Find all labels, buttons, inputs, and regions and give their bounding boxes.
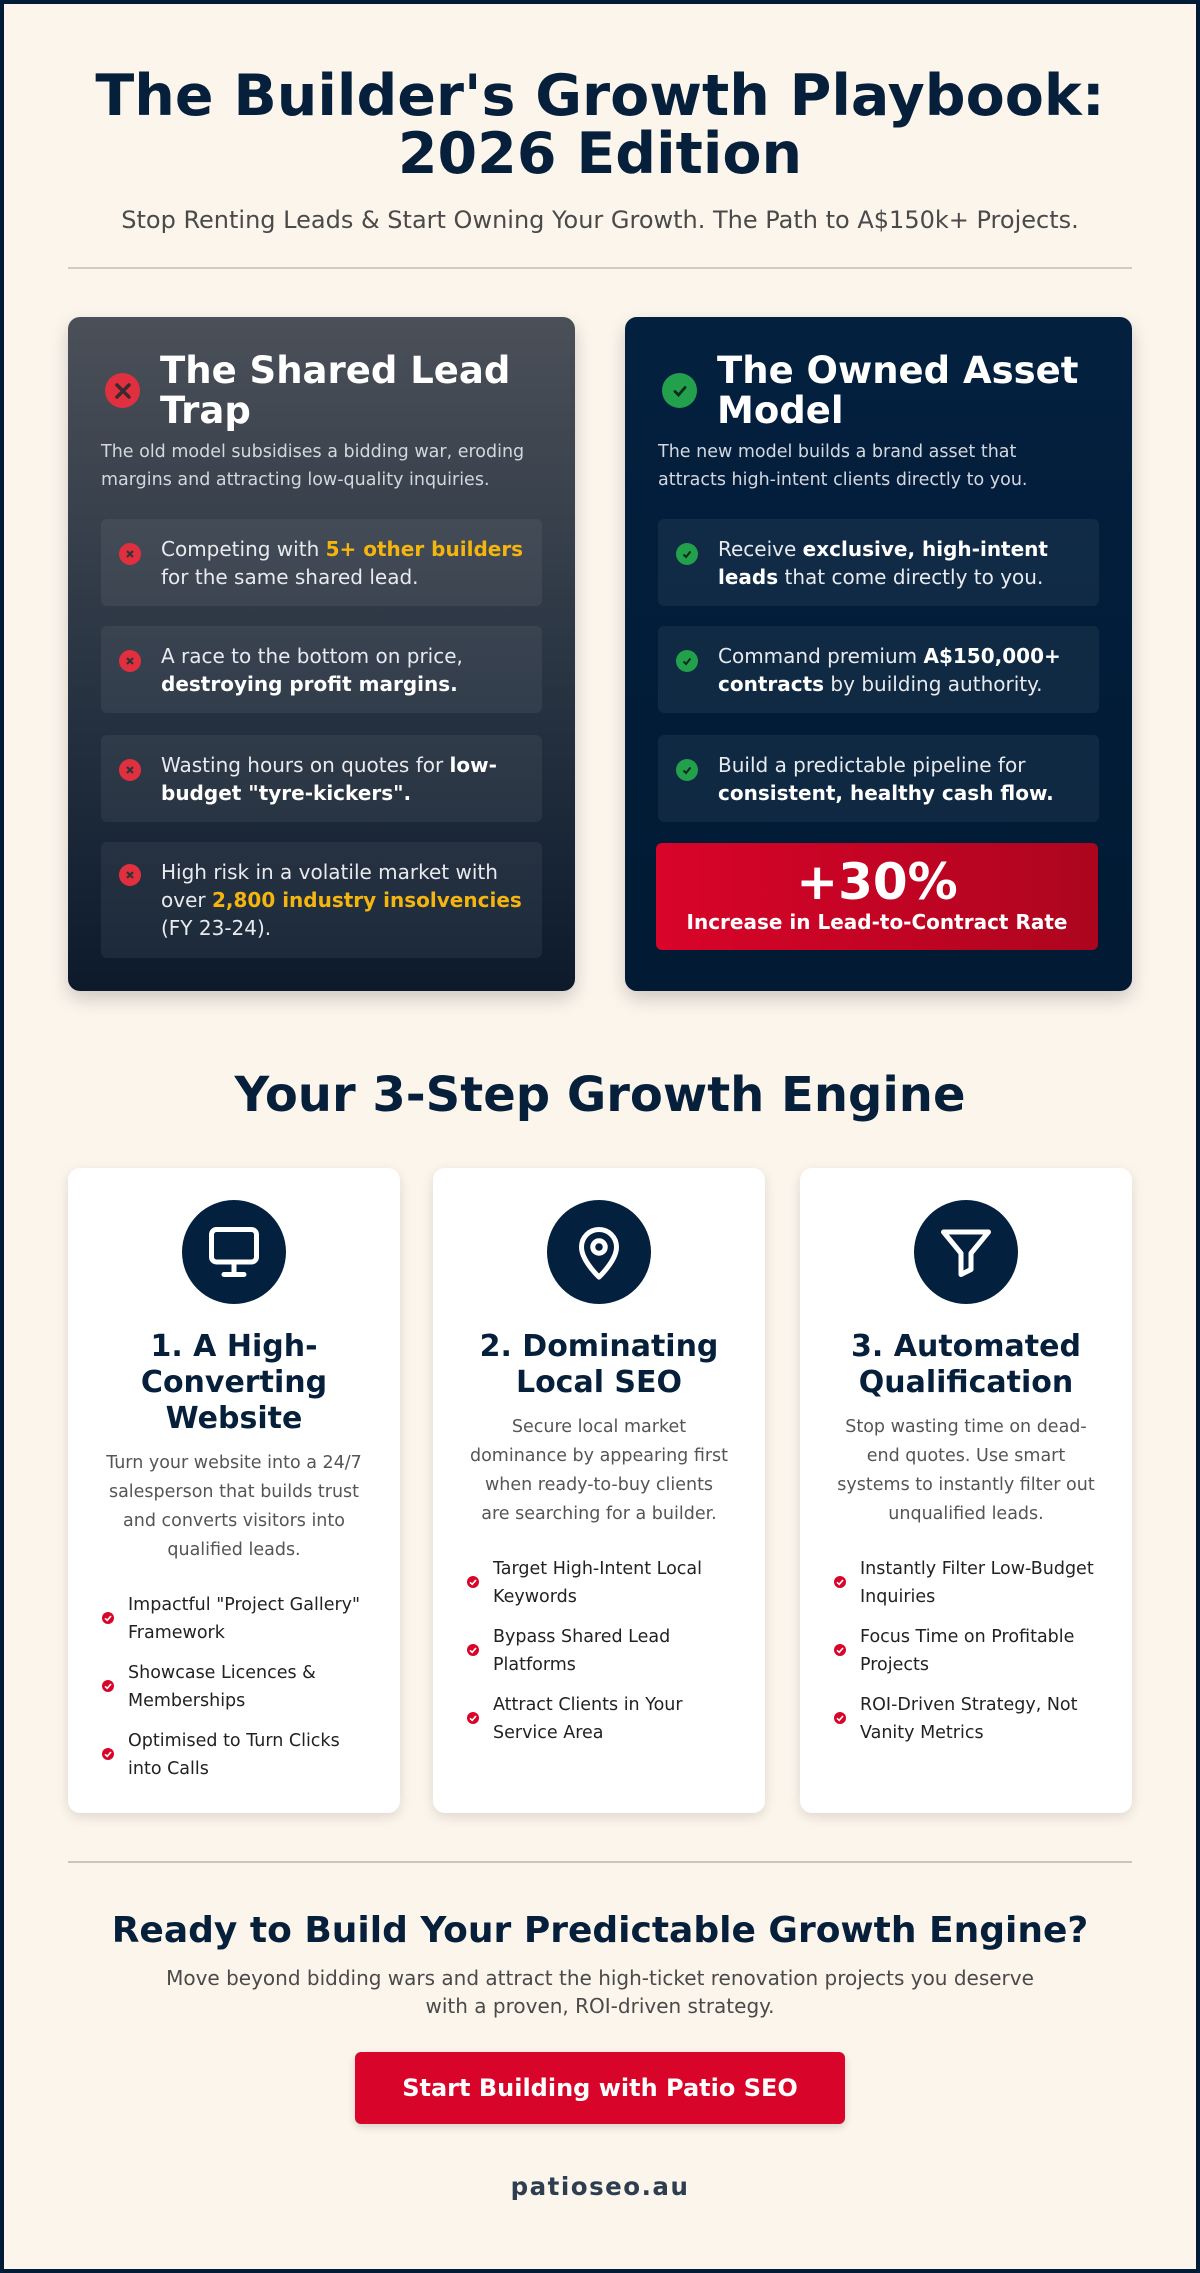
item 3: Wasting hours on quotes for low-budget "tyre-kickers". [161, 752, 497, 804]
description: Turn your website into a 24/7 [106, 1453, 362, 1473]
description [837, 1417, 1095, 1524]
CTA button: Start Building with Patio SEO [402, 2074, 798, 2102]
item 3: Build a predictable pipeline for consistent, healthy cash flow. [718, 752, 1054, 804]
card: step 2 local SEO [433, 1168, 765, 1813]
description: Stop wasting time on dead- [845, 1417, 1087, 1437]
bullets: Focus Time on Profitable Projects [860, 1627, 1074, 1674]
description: dominance by appearing first [470, 1446, 728, 1466]
item 3 [101, 735, 542, 822]
item 4 [101, 842, 542, 958]
item 2: A race to the bottom on price, destroying profit margins. [161, 644, 463, 696]
bullets: Impactful "Project Gallery" Framework [128, 1595, 360, 1642]
title: 2. Dominating Local SEO [480, 1329, 718, 1400]
item 1: Competing with 5+ other builders for the same shared lead. [161, 536, 523, 588]
item 1 [101, 519, 542, 606]
description: Secure local market [512, 1417, 686, 1437]
stat callout: +30%: +30% [796, 853, 958, 911]
card: step 3 qualification [800, 1168, 1132, 1813]
description: end quotes. Use smart [867, 1446, 1065, 1466]
bullets [834, 1559, 1094, 1742]
title: The Builder's Growth Playbook: [95, 63, 1105, 129]
icon: map pin [547, 1200, 651, 1304]
stat callout: +30%: Increase in Lead-to-Contract Rate [687, 910, 1067, 934]
title: 3. Automated Qualification [851, 1329, 1081, 1400]
item 4: High risk in a volatile market with over 2,800 industry insolvencies (FY 23-24). [161, 860, 522, 940]
CTA heading: Ready to Build Your Predictable Growth Engine? [112, 1910, 1088, 1951]
title: 1. A High-Converting Website [141, 1329, 327, 1436]
description: qualified leads. [167, 1540, 301, 1560]
heading: shared lead trap: The Shared Lead Trap [160, 349, 510, 432]
description: salesperson that builds trust [109, 1482, 359, 1502]
footer url: patioseo.au [511, 2172, 689, 2201]
stat callout: +30% [656, 843, 1098, 950]
bullets: Bypass Shared Lead Platforms [493, 1627, 670, 1674]
subtitle: Stop Renting Leads & Start Owning Your Growth. The Path to A$150k+ Projects. [121, 206, 1079, 234]
icon: funnel [914, 1200, 1018, 1304]
item 2: Command premium A$150,000+ contracts by building authority. [718, 644, 1061, 696]
description: and converts visitors into [123, 1511, 345, 1531]
bullets: Target High-Intent Local Keywords [493, 1559, 702, 1606]
panel: shared lead trap [68, 317, 575, 991]
bullets: Optimised to Turn Clicks into Calls [128, 1731, 340, 1778]
description: are searching for a builder. [481, 1504, 717, 1524]
section heading: Your 3-Step Growth Engine [234, 1067, 966, 1123]
title: 2026 Edition [398, 121, 802, 187]
description [106, 1453, 362, 1560]
bullets: ROI-Driven Strategy, Not Vanity Metrics [860, 1695, 1078, 1742]
title [95, 63, 1105, 187]
bullets [102, 1595, 360, 1778]
description: The old model subsidises a bidding war, eroding margins and attracting low-quality inquiries. [101, 442, 524, 490]
icon: monitor [182, 1200, 286, 1304]
bullets: Instantly Filter Low-Budget Inquiries [860, 1559, 1094, 1606]
CTA text: Move beyond bidding wars and attract the high-ticket renovation projects you deserve with a proven, ROI-driven strategy. [166, 1966, 1034, 2018]
description: when ready-to-buy clients [485, 1475, 713, 1495]
card: step 1 website [68, 1168, 400, 1813]
item 1 [658, 519, 1099, 606]
bullets [467, 1559, 702, 1742]
item 2 [658, 626, 1099, 713]
bullets: Attract Clients in Your Service Area [493, 1695, 683, 1742]
description: The new model builds a brand asset that attracts high-intent clients directly to you. [658, 442, 1028, 490]
description: systems to instantly filter out [837, 1475, 1095, 1495]
item 2 [101, 626, 542, 713]
bullets: Showcase Licences & Memberships [128, 1663, 316, 1710]
CTA button [355, 2052, 845, 2124]
heading: owned asset: The Owned Asset Model [717, 349, 1078, 432]
description [470, 1417, 728, 1524]
item 3 [658, 735, 1099, 822]
panel: owned asset model [625, 317, 1132, 991]
description: unqualified leads. [888, 1504, 1044, 1524]
item 1: Receive exclusive, high-intent leads that come directly to you. [718, 536, 1048, 588]
